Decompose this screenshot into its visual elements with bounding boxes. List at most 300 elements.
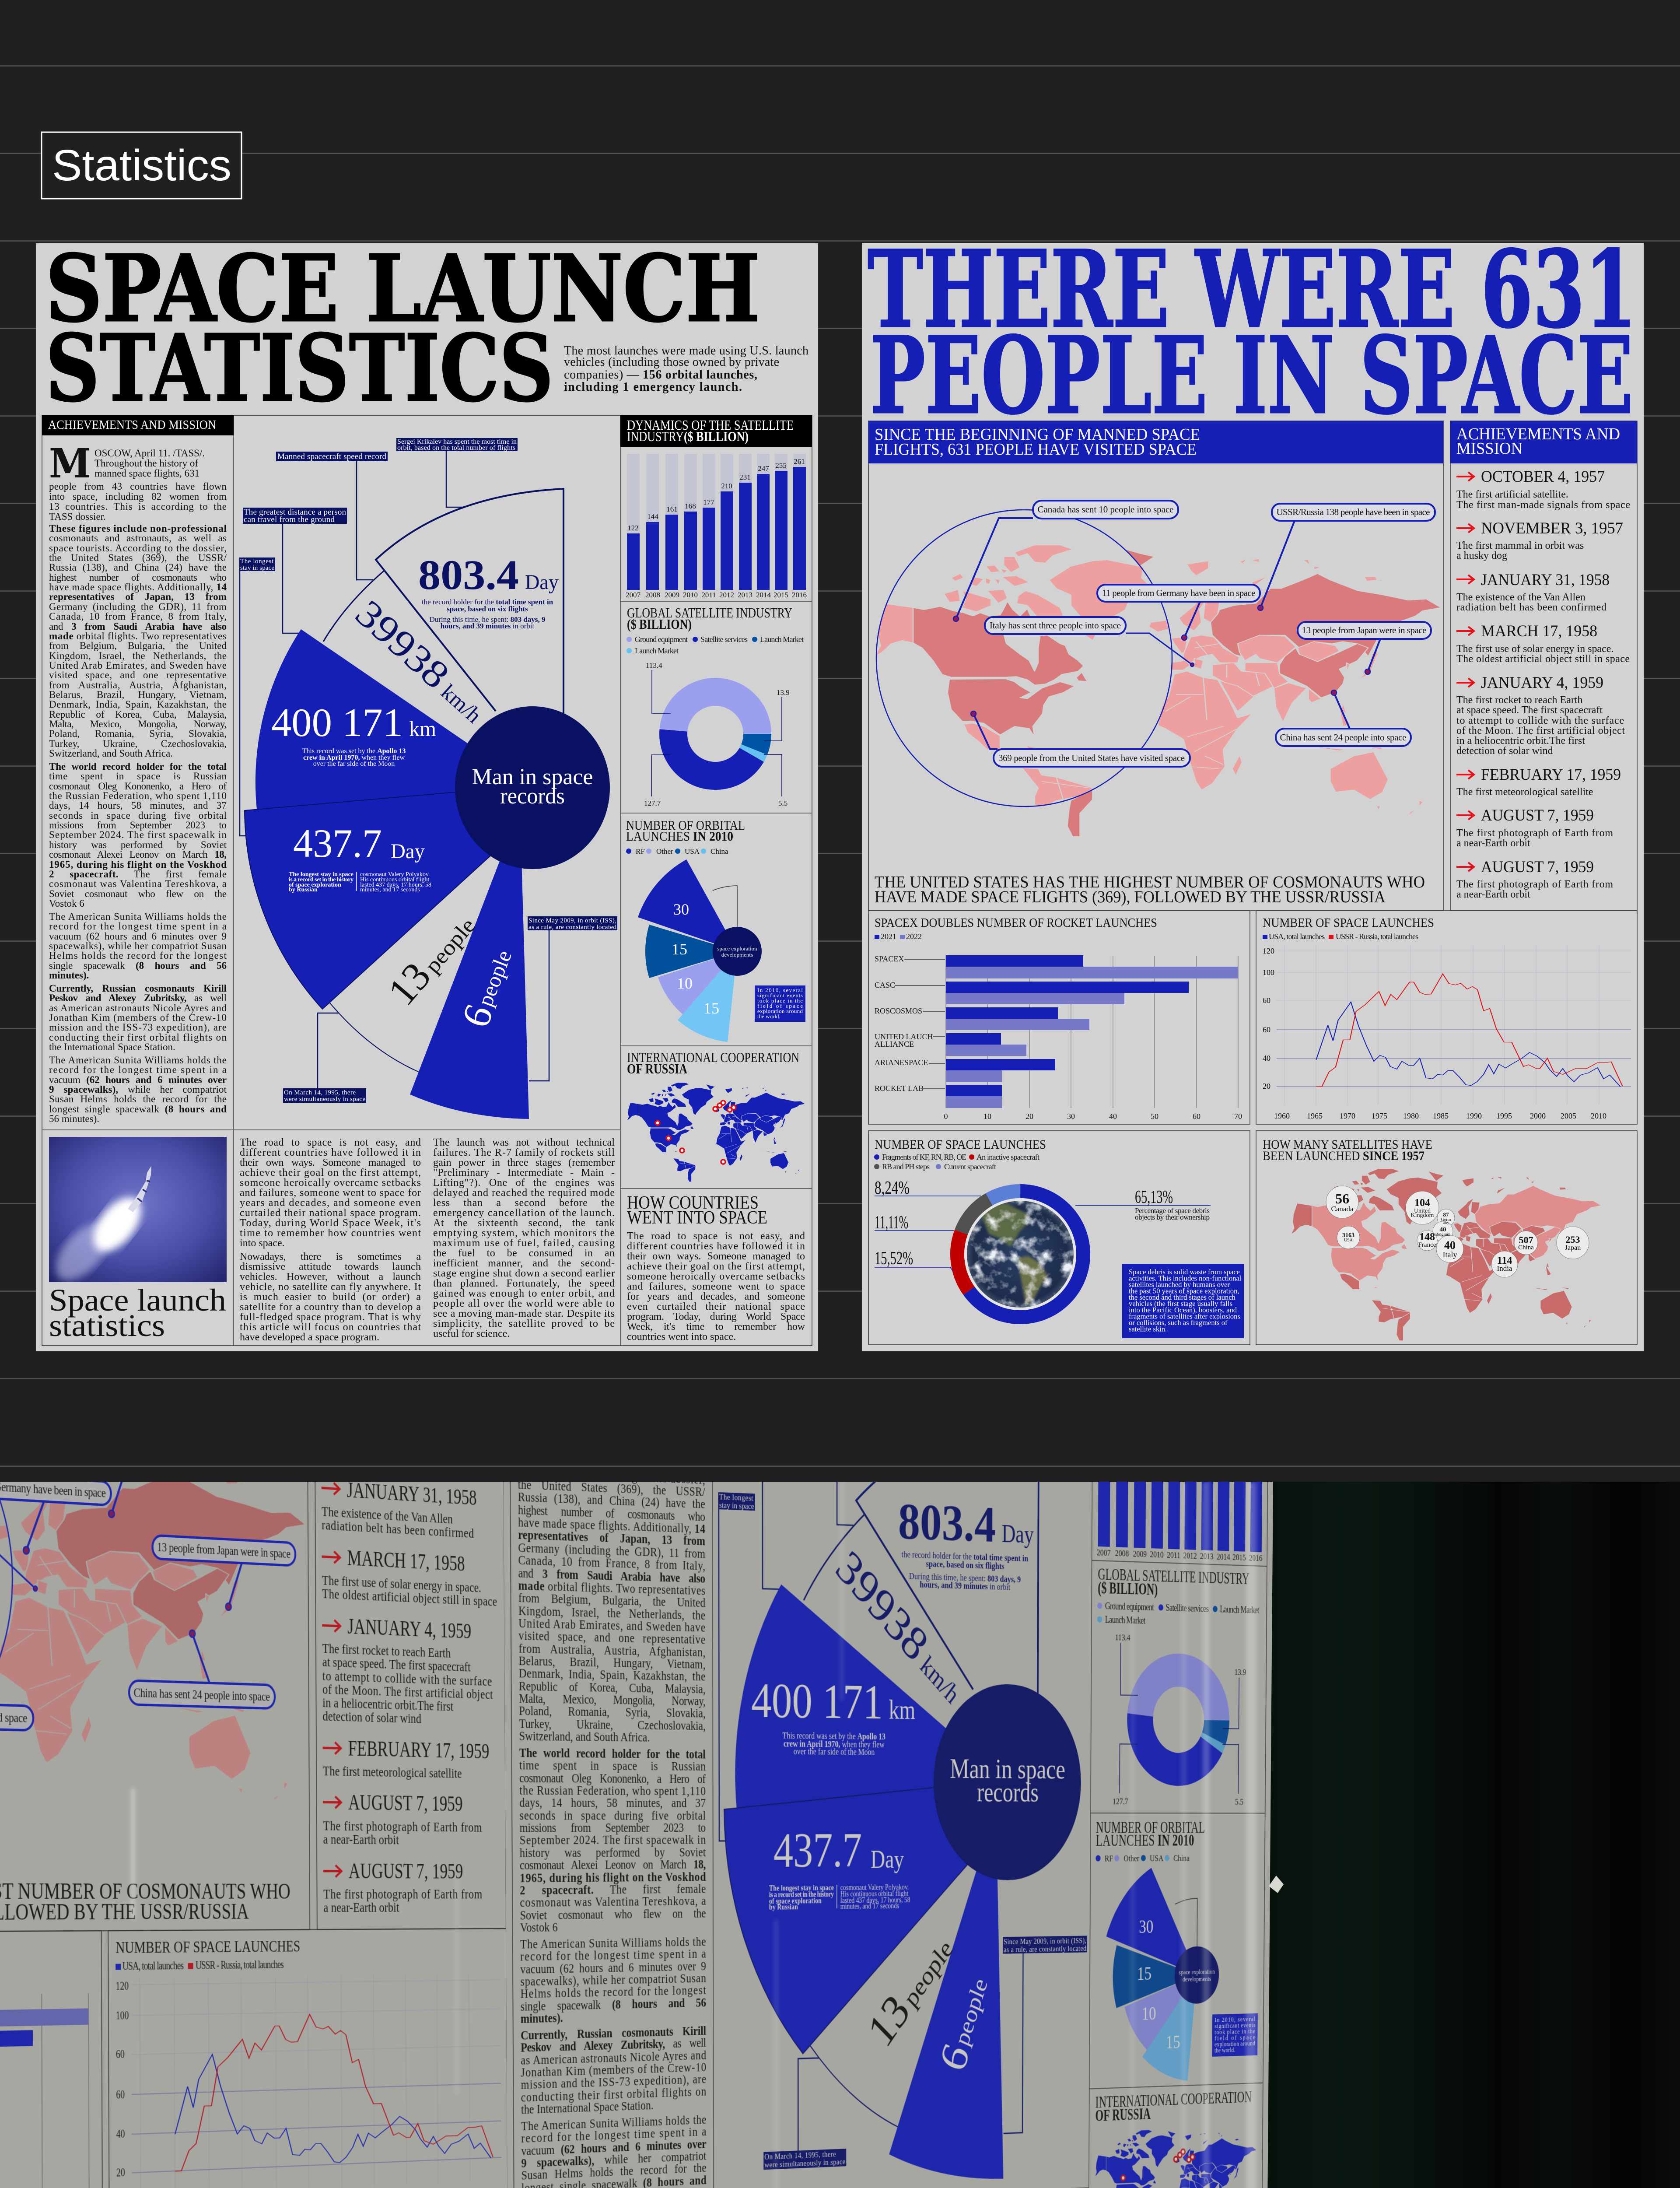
article text: cosmonaut Oleg Kononenko, a Hero of [49, 781, 227, 792]
article text: cosmonauts and astronauts, as well as [49, 533, 227, 543]
axis labels: 120 [1263, 947, 1274, 955]
text column 1: vehicles. However, without a launch [240, 1271, 421, 1283]
value: 437.7 day: The longest stay in space [289, 871, 354, 878]
text column 2: simplicity, the satellite proved to be [433, 1318, 615, 1329]
info box: satellites launched by humans over [1129, 1280, 1230, 1289]
text column 1: curtailed their national space program. [240, 1207, 421, 1219]
dates: AUGUST 7, 1959 [1481, 806, 1594, 824]
label: Statistics: Statistics [52, 141, 231, 190]
value: 6 people: 6 [453, 998, 501, 1033]
axis labels: 30 [1067, 1112, 1075, 1121]
descriptions: The first artificial satellite. [1456, 489, 1568, 500]
callout: speed record: Manned spacecraft speed record [277, 452, 387, 461]
axis labels: 1990 [1466, 1112, 1482, 1120]
callout: longest stay: The longest [240, 558, 274, 565]
legend: Satellite services [700, 635, 748, 644]
article text: These figures include non-professional [49, 523, 227, 534]
map dots [953, 605, 1370, 716]
row labels: ROCKET LAB [875, 1084, 924, 1093]
article text: Canada, 10 from France, 8 from Italy, [49, 611, 227, 622]
text column 2: less than a second before the [433, 1197, 615, 1209]
bar chart: 231 [739, 473, 751, 481]
text block: The road to space is not easy, and [627, 1231, 805, 1242]
article text: Susan Helms holds the record for the [49, 1094, 227, 1105]
axis labels: 100 [1263, 968, 1274, 977]
panel: international cooperation of Russia [627, 1049, 805, 1182]
axis labels: 10 [984, 1112, 991, 1121]
legend: Launch Market [635, 646, 679, 655]
bar chart: 2009 [665, 591, 679, 599]
value: 437.7 day: minutes, and 17 seconds [360, 887, 420, 893]
heading: achievements and mission [42, 415, 234, 435]
donut ring [932, 1166, 1108, 1342]
value: 400 171 km: 400 171 [271, 700, 403, 745]
callout: greatest distance: The greatest distance a person [244, 508, 346, 517]
heading: NUMBER OF SPACE LAUNCHES [875, 1137, 1046, 1152]
article text: Soviet cosmonaut who flew on the [49, 888, 227, 899]
dates: FEBRUARY 17, 1959 [1481, 766, 1621, 784]
bubble labels: Germ [1441, 1217, 1451, 1222]
legend: Ground equipment [635, 635, 688, 644]
descriptions: The first mammal in orbit was [1456, 540, 1584, 551]
info box: the second and third stages of launch [1129, 1293, 1236, 1301]
fan chart [638, 859, 762, 1042]
callout: longest stay: stay in space [240, 565, 274, 572]
legend: Current spacecraft [944, 1162, 996, 1171]
title [868, 228, 1637, 438]
row labels [875, 954, 945, 1093]
bar chart: 2007 [626, 591, 640, 599]
article text: and 3 from Saudi Arabia have also [49, 621, 227, 632]
bar chart: 247 [758, 464, 769, 473]
text block: different countries have followed it in [627, 1241, 805, 1252]
dates: OCTOBER 4, 1957 [1481, 468, 1605, 486]
axis labels [1263, 947, 1606, 1120]
heading: NUMBER OF ORBITAL [626, 817, 745, 833]
article text: The American Sunita Williams holds the [49, 911, 227, 922]
legend: 2021 [881, 932, 896, 941]
bar chart: 2010 [683, 591, 698, 599]
heading: DYNAMICS OF THE SATELLITE [627, 417, 794, 433]
axis labels: 60 [1193, 1112, 1200, 1121]
article text: Germany (including the GDR), 11 from [49, 601, 227, 612]
text column 1: Nowadays, there is sometimes a [240, 1251, 421, 1262]
country bubbles [1326, 1186, 1589, 1277]
heading: SPACEX DOUBLES NUMBER OF ROCKET LAUNCHES [875, 916, 1157, 930]
heading [627, 1049, 799, 1076]
dates: JANUARY 31, 1958 [1481, 571, 1610, 589]
callout: greatest distance: can travel from the ground [244, 515, 335, 524]
text column 1: someone heroically overcame setbacks [240, 1177, 421, 1189]
world map: pink [875, 545, 1441, 837]
text column 1: satellite for a country than to develop a [240, 1301, 421, 1313]
callout pills [985, 501, 1435, 767]
axis labels: 20 [1026, 1112, 1033, 1121]
callout: March 1995: On March 14, 1995, there [284, 1089, 356, 1096]
descriptions: The first rocket to reach Earth [1456, 694, 1583, 706]
heading [1263, 1137, 1432, 1163]
bubble labels: Italy [1443, 1250, 1457, 1259]
bubble labels: any [1443, 1220, 1449, 1225]
label: Statistics [42, 132, 242, 199]
legend: Fragments of KF, RN, RB, OE [882, 1153, 966, 1161]
value: 803.4 day [418, 551, 559, 630]
article text: spacewalks), while her compatriot Susan [49, 940, 227, 951]
article text: vacuum (62 hours and 6 minutes over [49, 1074, 227, 1085]
callout text: USSR/Russia 138 people have been in space [1277, 507, 1430, 517]
value: 437.7 day: by Russian [289, 887, 318, 893]
heading: WENT INTO SPACE [627, 1208, 767, 1228]
row labels: ARIANESPACE [875, 1058, 928, 1067]
percentage labels: 65,13% [1135, 1187, 1173, 1207]
text column 2: "Preliminary - Intermediate - Main - [433, 1167, 615, 1178]
percentage labels: 15,52% [875, 1248, 913, 1269]
text column 2: failures. The R-7 family of rockets still [433, 1147, 615, 1158]
bar chart: 255 [775, 461, 787, 470]
bubble labels: France [1418, 1241, 1436, 1248]
title: STATISTICS [46, 314, 553, 422]
text column 2: maximum use of fuel, failed, causing [433, 1238, 615, 1249]
descriptions: The first use of solar energy in space. [1456, 643, 1614, 655]
article text: OSCOW, April 11. /TASS/. [94, 448, 205, 459]
text block: for years and decades, and someone [627, 1291, 805, 1302]
axis labels: 60 [1263, 1025, 1270, 1034]
callout text: 13 people from Japan were in space [1302, 625, 1426, 635]
value: 437.7 day: 437.7 [293, 821, 382, 866]
value: 437.7 day: Day [391, 840, 425, 863]
bubble labels: Kingdom [1411, 1212, 1434, 1219]
article text: Kingdom, Israel, the Netherlands, the [49, 650, 227, 661]
article text: 9 spacewalks), while her compatriot [49, 1084, 227, 1095]
article text: The American Sunita Williams holds the [49, 1055, 227, 1066]
value: 437.7 day: of space exploration [289, 882, 341, 888]
torn paper flecks on the wall [0, 1482, 1680, 2188]
article text: the International Space Station. [49, 1041, 175, 1052]
text column 2: emergency cancellation of the launch. [433, 1207, 615, 1219]
fan chart: 10 [677, 975, 693, 992]
info box: vehicles (the first stage usually falls [1129, 1300, 1232, 1308]
dates: NOVEMBER 3, 1957 [1481, 519, 1623, 537]
bar chart: 177 [703, 498, 714, 506]
article text: Jonathan Kim (members of the Crew-10 [49, 1012, 227, 1023]
text column 1: different countries have followed it in [240, 1147, 421, 1158]
text column 2 [433, 1137, 615, 1339]
bubble labels: 114 [1497, 1255, 1512, 1266]
text column 1: into space. [240, 1238, 285, 1249]
grid [946, 956, 1238, 1108]
heading: INTERNATIONAL COOPERATION [627, 1049, 799, 1065]
poster copy: there were 631 people, photographed in perspective [0, 1422, 515, 2188]
fan chart: 15 [672, 940, 687, 958]
descriptions: a husky dog [1456, 550, 1507, 561]
heading: ACHIEVEMENTS AND [1456, 425, 1620, 443]
center circle: man in space records [455, 706, 610, 869]
grid [1277, 945, 1631, 1105]
text column 2: useful for science. [433, 1328, 510, 1339]
value: 803.4 day: During this time, he spent: 803 days, 9 [430, 615, 545, 624]
text block: someone heroically overcame setbacks [627, 1271, 805, 1282]
axis labels: 2010 [1591, 1112, 1606, 1120]
descriptions: a near-Earth orbit [1456, 838, 1530, 849]
bubble labels: 253 [1565, 1234, 1580, 1245]
callout: longest stay [239, 558, 275, 572]
heading: NUMBER OF SPACE LAUNCHES [1263, 916, 1434, 930]
value: 6 people: people [472, 947, 516, 1010]
info box: fragments of satellites after explosions [1129, 1312, 1240, 1321]
fan chart: space exploration [717, 945, 757, 952]
article text: from Australia, Austria, Afghanistan, [49, 680, 227, 691]
text block [627, 1231, 805, 1343]
value: 803.4 day: 803.4 [418, 551, 519, 598]
article text: made orbital flights. Two representatives [49, 631, 227, 642]
panel: how many satellites launched [1256, 1131, 1637, 1345]
bar chart: 261 [794, 457, 805, 466]
intro text [564, 344, 808, 394]
fan chart: developments [721, 951, 753, 958]
panel: space debris donut [868, 1131, 1250, 1345]
callout: March 1995 [283, 1088, 366, 1103]
summary heading [875, 873, 1425, 906]
article text: manned space flights, 631 [94, 468, 200, 479]
heading [868, 421, 1443, 463]
bar chart: 2011 [701, 591, 716, 599]
axis labels: 1985 [1433, 1112, 1449, 1120]
heading: OF RUSSIA [627, 1061, 687, 1076]
poster: there were 631 people in space [862, 228, 1644, 1351]
text column 1 [240, 1137, 421, 1343]
callout: ISS: as a rule, are constantly located [528, 924, 617, 931]
callout text: 369 people from the United States have visited space [998, 753, 1185, 763]
bar chart: 144 [647, 512, 658, 521]
article text: as American astronauts Nicole Ayres and [49, 1003, 227, 1013]
text block: their own ways. Someone managed to [627, 1251, 805, 1262]
descriptions: radiation belt has been confirmed [1456, 602, 1606, 613]
value: 437.7 day [289, 821, 431, 893]
article text: days, 14 hours, 58 minutes, and 37 [49, 800, 227, 811]
legend: RB and PH steps [882, 1162, 930, 1171]
bubble labels: 40 [1439, 1226, 1446, 1233]
descriptions: The existence of the Van Allen [1456, 592, 1586, 603]
bar chart: 2008 [645, 591, 660, 599]
intro text: vehicles (including those owned by private [564, 355, 779, 369]
callout: Krikalev: Sergei Krikalev has spent the most time in [397, 438, 517, 445]
callout: ISS [528, 916, 617, 931]
percentage labels: objects by their ownership [1135, 1213, 1210, 1221]
bubble labels: USA [1344, 1238, 1353, 1243]
article text: into space, including 82 women from [49, 491, 227, 502]
axis labels: 60 [1263, 996, 1270, 1005]
value: 437.7 day: lasted 437 days, 17 hours, 58 [360, 882, 431, 888]
bar chart: 2014 [756, 591, 771, 599]
row labels: ALLIANCE [875, 1040, 914, 1048]
article text: 13 countries. This is according to the [49, 501, 227, 512]
article text: Russia (138), and China (24) have the [49, 562, 227, 573]
callout text: Italy has sent three people into space [990, 620, 1121, 631]
heading: space launch statistics: statistics [49, 1308, 165, 1343]
article text: minutes). [49, 970, 89, 981]
donut labels: 113.4 [646, 661, 662, 670]
bubble labels: 104 [1414, 1197, 1430, 1209]
row labels: ROSCOSMOS [875, 1006, 922, 1015]
heading [620, 415, 812, 447]
descriptions: at space speed. The first spacecraft [1456, 705, 1603, 716]
bar chart: 2012 [719, 591, 734, 599]
bubble labels: China [1518, 1244, 1534, 1251]
value: 6 people [453, 947, 516, 1033]
callout: ISS: Since May 2009, in orbit (ISS), [528, 917, 616, 924]
article text: Republic of Korea, Cuba, Malaysia, [49, 709, 227, 720]
article text: cosmonaut Alexei Leonov on March 18, [49, 849, 227, 860]
text block: achieve their goal on the first attempt, [627, 1261, 805, 1272]
heading: HOW COUNTRIES [627, 1193, 759, 1213]
text column 1: The road to space is not easy, and [240, 1137, 421, 1148]
heading: INDUSTRY($ BILLION) [627, 428, 749, 444]
text column 1: their own ways. Someone managed to [240, 1157, 421, 1168]
row labels: SPACEX [875, 954, 904, 963]
wedge: 400 171 km [256, 629, 532, 810]
value: 39938 km/h [347, 592, 486, 728]
bubble labels: 507 [1519, 1234, 1533, 1245]
legend: Other [656, 847, 673, 856]
note box: took place in the [757, 997, 803, 1004]
heading: SINCE THE BEGINNING OF MANNED SPACE [875, 425, 1200, 444]
article text: TASS dossier. [49, 511, 106, 522]
heading: space launch statistics [49, 1283, 226, 1343]
text block: program. Today, during World Space [627, 1311, 805, 1322]
panel: map of people in space [868, 421, 1443, 911]
info box [1122, 1264, 1244, 1338]
axis labels: 1965 [1307, 1112, 1323, 1120]
heading [627, 1193, 767, 1228]
legend: USSR - Russia, total launches [1336, 932, 1418, 941]
value: 13 people: people [420, 913, 480, 978]
heading [627, 605, 792, 632]
poster: space launch statistics [36, 235, 818, 1351]
heading: HOW MANY SATELLITES HAVE [1263, 1137, 1432, 1152]
heading: BEEN LAUNCHED SINCE 1957 [1263, 1149, 1424, 1163]
article text: 2 spacecraft. The first female [49, 869, 227, 880]
text block: and failures, someone went to space [627, 1281, 805, 1292]
bubble labels: Japan [1565, 1244, 1581, 1252]
heading: MISSION [1456, 439, 1522, 458]
paper creases and highlights [0, 1482, 1680, 2188]
article text: record for the longest time spent in a [49, 1064, 227, 1075]
descriptions: The first photograph of Earth from [1456, 828, 1613, 839]
info box: the past 50 years of space exploration, [1129, 1287, 1239, 1295]
heading: space launch statistics: Space launch [49, 1283, 226, 1318]
bar chart: 161 [666, 505, 678, 513]
legend: Launch Market [760, 635, 804, 644]
text column 2: stage engine shut down a second earlier [433, 1268, 615, 1279]
article text: Currently, Russian cosmonauts Kirill [49, 983, 227, 994]
bubble labels: 3163 [1342, 1232, 1354, 1239]
wedge: 437.7 days [245, 785, 532, 1009]
descriptions: The first meteorological satellite [1456, 786, 1593, 798]
legend [875, 932, 922, 941]
value: 803.4 day: space, based on six flights [447, 605, 528, 613]
axis labels: 1980 [1403, 1112, 1419, 1120]
info box: into the Pacific Ocean), boosters, and [1129, 1306, 1237, 1314]
wedge: 6 people [410, 858, 529, 1119]
value: 437.7 day: His continuous orbital flight [360, 877, 429, 883]
text column 2: the fuel to be consumed in an [433, 1248, 615, 1259]
article text: seconds in space during five orbital [49, 810, 227, 821]
value: 400 171 km: over the far side of the Moon [313, 760, 395, 768]
dates [1481, 468, 1623, 876]
world map: blue [627, 1083, 805, 1182]
axis labels [944, 1112, 1242, 1121]
descriptions: The first photograph of Earth from [1456, 879, 1613, 890]
center circle: man in space records: records [500, 784, 565, 809]
legend: 2022 [906, 932, 922, 941]
article text: missions from September 2023 to [49, 820, 227, 831]
bubble labels: 56 [1335, 1191, 1349, 1206]
text block: countries went into space. [627, 1331, 736, 1343]
axis labels: 1960 [1274, 1112, 1290, 1120]
panel: number of space launches line chart [1256, 911, 1637, 1124]
descriptions: to attempt to collide with the surface [1456, 715, 1624, 726]
text column 1: achieve their goal on the first attempt, [240, 1167, 421, 1178]
value: 400 171 km: This record was set by the Apollo 13 [302, 747, 406, 755]
article text: Denmark, India, Spain, Kazakhstan, the [49, 699, 227, 710]
descriptions: of the Moon. The first artificial object [1456, 725, 1625, 736]
article text: highest number of cosmonauts who [49, 572, 227, 583]
callout: Krikalev: orbit, based on the total number of flights [397, 444, 515, 452]
panel: number of orbital launches [626, 817, 805, 1042]
article text: Turkey, Ukraine, Czechoslovakia, [49, 738, 227, 749]
bubble labels: Belgium [1435, 1232, 1450, 1237]
summary heading: THE UNITED STATES HAS THE HIGHEST NUMBER OF COSMONAUTS WHO [875, 873, 1425, 891]
article text: vacuum (62 hours and 6 minutes over 9 [49, 931, 227, 942]
heading: achievements and mission: ACHIEVEMENTS AND MISSION [48, 418, 216, 432]
descriptions [1456, 489, 1630, 900]
axis labels: 0 [944, 1112, 948, 1121]
bar chart: 2015 [774, 591, 788, 599]
article text: Malta, Mexico, Mongolia, Norway, [49, 719, 227, 729]
article text: mission and the ISS-73 expedition), are [49, 1022, 227, 1033]
article text: conducting their first orbital flights on [49, 1032, 227, 1043]
dates: JANUARY 4, 1959 [1481, 674, 1603, 692]
article text: Switzerland, and South Africa. [49, 748, 173, 759]
callout text: Canada has sent 10 people into space [1038, 504, 1173, 515]
text column 2: At the sixteenth second, the tank [433, 1217, 615, 1229]
text column 1: vehicle, no satellite can fly anywhere. It [240, 1281, 421, 1293]
earth image [962, 1196, 1078, 1312]
article text: people from 43 countries have flown [49, 481, 227, 492]
percentage labels: Percentage of space debris [1135, 1206, 1210, 1215]
article text: single spacewalk (8 hours and 56 [49, 960, 227, 971]
text column 1: this article will focus on countries that [240, 1322, 421, 1333]
axis labels: 50 [1151, 1112, 1158, 1121]
article text: M [49, 440, 91, 487]
axis labels: 40 [1109, 1112, 1117, 1121]
legend: China [710, 847, 728, 856]
note box: significant events [757, 992, 803, 999]
text column 2: inefficient manner, and the second- [433, 1258, 615, 1269]
bar chart: 2016 [792, 591, 807, 599]
axis labels: 70 [1234, 1112, 1242, 1121]
axis labels: 2005 [1561, 1112, 1576, 1120]
donut labels: 13.9 [777, 688, 790, 697]
callout leader lines [240, 451, 549, 1088]
article text [49, 440, 227, 1124]
bar chart: 210 [721, 482, 732, 490]
donut labels: 5.5 [778, 799, 788, 807]
bubble labels [1331, 1191, 1581, 1273]
descriptions: The oldest artificial object still in space [1456, 653, 1630, 665]
wedge: speed record outline [323, 571, 384, 642]
intro text: including 1 emergency launch. [564, 380, 742, 394]
